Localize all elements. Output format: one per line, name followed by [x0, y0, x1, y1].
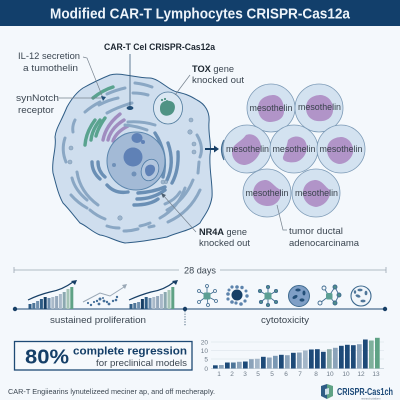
illustration: CAR-T cell: [53, 74, 212, 243]
x axis labels: 2: [230, 371, 234, 378]
header: title banner: [0, 0, 400, 26]
label: tumor ductal adenocarcinama: [277, 205, 360, 249]
label: synNotch receptor: [16, 93, 106, 116]
icon: dotted ring cell: [226, 285, 249, 306]
y axis labels: [201, 340, 208, 373]
label: TOX gene knocked out: [175, 64, 244, 95]
tumor cell 2: mesothelin: [298, 102, 341, 112]
header: title banner: Modified CAR-T Lymphocytes CRISPR-Cas12a: [50, 6, 351, 22]
x axis labels: [217, 371, 380, 378]
tumor cell 4: [270, 125, 318, 173]
tumor cell 1: [247, 84, 295, 132]
icon: network cell 1: [198, 284, 218, 306]
perinuclear reticulum arcs: [92, 133, 178, 205]
x axis labels: 13: [372, 371, 380, 378]
x axis labels: 10: [342, 371, 350, 378]
cell membrane: [53, 74, 212, 243]
label: synNotch receptor: synNotch: [16, 93, 59, 104]
tumor cell 7: mesothelin: [295, 188, 338, 198]
x axis labels: 7: [298, 371, 302, 378]
label: tumor ductal adenocarcinama: adenocarcinama: [289, 238, 360, 249]
chart icon: rising bars 1: [28, 280, 77, 309]
x axis labels: 1: [217, 371, 221, 378]
label: TOX gene knocked out: knocked out: [192, 75, 244, 86]
label: NR4A gene knocked out: knocked out: [199, 238, 250, 249]
callout: 80% complete regression: complete regression: [73, 346, 187, 358]
endoplasmic reticulum: teal arcs: [85, 87, 113, 145]
label: tumor ductal adenocarcinama: tumor ductal: [289, 226, 343, 237]
vesicles: [68, 118, 196, 220]
bar chart: regression by model: [201, 338, 384, 378]
icon: filled round cell: [288, 286, 310, 306]
label: cytotoxicity: cytotoxicity: [261, 315, 309, 326]
tumor cell 5: [317, 125, 365, 173]
label: IL-12 secretion: [18, 51, 103, 98]
tumor cell 7: [292, 169, 340, 217]
footer note: CAR-T Engiiearins lynutelizeed meciner ap, and off mecherapIy.: [8, 387, 215, 396]
tumor cell 2: [295, 84, 343, 132]
x axis labels: 8: [314, 371, 318, 378]
y axis labels: 0: [204, 366, 208, 373]
label: synNotch receptor: receptor: [18, 105, 54, 116]
label: TOX gene knocked out: TOX gene: [192, 64, 234, 75]
arrow: cell to tumor: [205, 140, 224, 160]
vacuole with green organelle: [154, 92, 182, 124]
endoplasmic reticulum: purple arcs: [103, 114, 128, 141]
y axis labels: 20: [201, 340, 208, 346]
timeline: 28 days bracket: 28 days: [184, 266, 216, 276]
tumor cell 4: mesothelin: [272, 144, 316, 154]
chart icon: rising bars 2: [129, 280, 178, 309]
tumor cell 6: mesothelin: [246, 188, 288, 198]
label: NR4A gene knocked out: NR4A gene: [199, 227, 247, 238]
tumor cell 1: mesothelin: [250, 103, 292, 113]
timeline: 28 days bracket: [14, 266, 386, 276]
x axis labels: 6: [284, 371, 288, 378]
bars: [213, 338, 380, 368]
tumor cell 3: [223, 125, 271, 173]
callout: 80% complete regression: [14, 342, 192, 370]
chart icon: scatter trend: [83, 284, 127, 306]
tumor cell 3: mesothelin: [226, 144, 269, 154]
x axis labels: 5: [256, 371, 260, 378]
y axis labels: 10: [201, 348, 208, 355]
x axis labels: 12: [357, 371, 365, 378]
nucleus: [107, 132, 165, 190]
x axis labels: 5: [270, 371, 274, 378]
timeline axis: [13, 307, 387, 326]
label: IL-12 secretion: a tumothelin: [23, 63, 78, 74]
icon: network cell 3: [318, 285, 341, 305]
callout: 80% complete regression: 80%: [25, 346, 69, 368]
label: sustained proliferation: sustained proliferation: [50, 315, 146, 326]
label: CAR-T Cel CRISPR-Cas12a: CAR-T Cel CRISPR-Cas12a: [104, 42, 216, 52]
label: CAR-T Cel CRISPR-Cas12a: [104, 42, 216, 110]
label: NR4A gene knocked out: [161, 193, 250, 249]
icon: outlined round cell: [351, 286, 371, 306]
tumor cell 6: [243, 169, 291, 217]
callout: 80% complete regression: for preclinical models: [96, 358, 187, 369]
label: IL-12 secretion: IL-12 secretion: [18, 51, 80, 62]
logo: CRISPR-Cas1ch: [321, 384, 393, 400]
endoplasmic reticulum: blue arcs: [63, 83, 201, 231]
tumor cell 5: mesothelin: [320, 144, 362, 154]
x axis labels: 10: [326, 371, 334, 378]
x axis labels: 3: [243, 371, 247, 378]
icon: network cell 2: [258, 285, 278, 307]
y axis labels: 5: [204, 356, 208, 364]
tumor cell cluster: [223, 84, 365, 217]
icon: logo mark: [321, 384, 333, 399]
